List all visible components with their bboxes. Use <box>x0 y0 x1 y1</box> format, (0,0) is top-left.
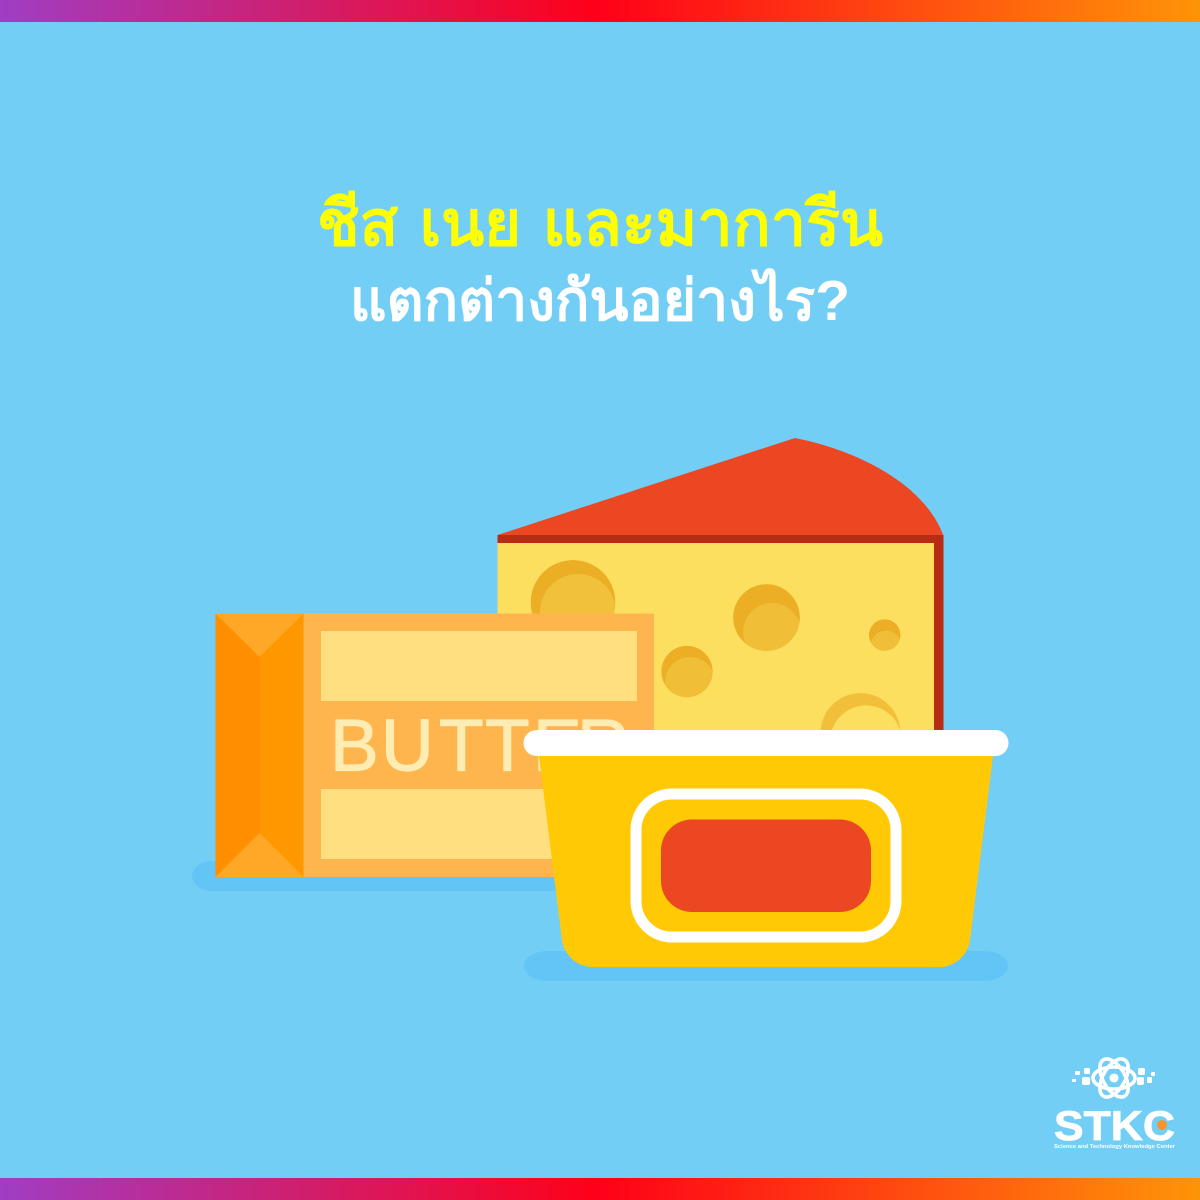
butter wrapper flap <box>216 614 304 877</box>
butter upper panel <box>321 631 637 701</box>
cheese hole 5 <box>820 693 900 730</box>
STKC logo <box>1054 1054 1175 1150</box>
cheese hole 3 <box>661 646 713 698</box>
title: line two: แตกต่างกันอย่างไร? <box>350 269 850 333</box>
tub label frame <box>636 794 896 937</box>
logo tagline: Science and Technology Knowledge Center <box>1054 1144 1175 1150</box>
cheese face <box>498 543 934 733</box>
cheese rind edge <box>498 535 944 733</box>
logo atom icon <box>1093 1054 1135 1102</box>
butter wrapper front <box>303 614 654 877</box>
tub label center <box>661 820 871 912</box>
butter label: BUTTER <box>330 706 630 786</box>
margarine tub <box>524 730 1008 967</box>
tub lid <box>524 730 1008 756</box>
cheese hole 2 <box>733 584 800 651</box>
title: line one: ชีส เนย และมาการีน <box>317 189 883 259</box>
logo orange dot <box>1157 1120 1167 1130</box>
butter shadow <box>192 861 612 891</box>
cheese rind top <box>498 438 944 536</box>
tub body <box>539 756 993 967</box>
margarine tub shadow <box>524 951 1008 981</box>
butter lower panel <box>321 789 637 859</box>
cheese hole 1 <box>530 560 616 614</box>
food illustration <box>192 438 1175 1149</box>
cheese hole 4 <box>869 619 900 651</box>
bottom gradient bar <box>0 1178 1200 1200</box>
top gradient bar <box>0 0 1200 22</box>
logo wordmark: STKC <box>1054 1102 1175 1149</box>
logo pixel dots <box>1072 1068 1155 1085</box>
butter pack <box>216 614 654 877</box>
cheese wedge <box>498 438 944 730</box>
